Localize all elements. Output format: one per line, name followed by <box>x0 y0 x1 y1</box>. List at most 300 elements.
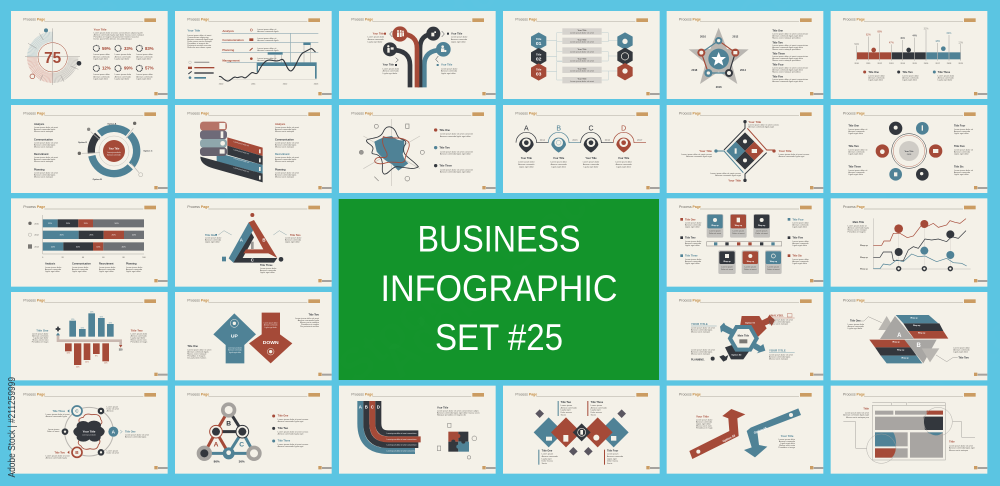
top triangles <box>878 316 914 339</box>
triangle labels: Ligula eget dolor <box>285 241 300 244</box>
slide footer <box>810 92 823 95</box>
slide footer <box>810 373 823 376</box>
text list: Aenean commodo ligula <box>275 128 297 131</box>
inner circle <box>99 136 129 166</box>
pin connector line <box>516 132 646 143</box>
tree nodes <box>383 26 451 57</box>
pin letters <box>524 126 626 133</box>
title one: Penatibus et magn <box>32 341 48 344</box>
title two <box>558 401 578 416</box>
bubbles <box>894 220 954 259</box>
process labels: Management <box>222 59 240 63</box>
band letters <box>359 404 380 409</box>
slide header <box>187 392 320 397</box>
stat captions: Ligula eget dolor <box>115 58 130 61</box>
puzzle icons <box>437 423 477 459</box>
hexagon option labels <box>731 321 756 357</box>
title one: Penatibus et magnis <box>187 354 205 357</box>
column notes: Aenean commodo <box>126 268 143 271</box>
band letters: C <box>371 404 374 409</box>
tree captions <box>368 36 468 75</box>
years: 2010 <box>700 35 706 39</box>
column notes: Communication <box>72 263 91 266</box>
right labels: Lorem ipsum dolor <box>792 222 809 225</box>
panel: slide 8 ribbons <box>175 105 332 193</box>
row labels: Wrap up <box>860 244 869 247</box>
main title: Penatibus et magnis <box>848 231 866 234</box>
lollipop labels: 30% <box>900 38 905 40</box>
teal bars <box>69 313 114 337</box>
side notes: Lorem ipsum <box>107 450 118 453</box>
years: 2016 <box>605 140 611 142</box>
left text list: Lorem ipsum dolor sit amet <box>34 156 58 159</box>
legend: Aenean commodo ligula eget <box>278 445 304 448</box>
bar values <box>66 312 113 368</box>
bar text: Your Title <box>578 67 587 70</box>
left text list: Communication <box>34 138 53 141</box>
slide header: Process Page <box>23 299 45 303</box>
side notes: Dolor sit amet <box>107 408 119 411</box>
bar value labels: 15% <box>84 223 88 225</box>
triangle labels: Lorem ipsum dolor <box>205 237 222 240</box>
labels: Aenean commodo <box>848 325 865 328</box>
percentages: 57% <box>145 66 154 71</box>
side notes: Lorem ipsum <box>107 406 118 409</box>
top cards: Lorem ipsum <box>733 230 744 233</box>
dial chart <box>25 28 80 85</box>
text list: Massa sociis natoque <box>275 130 295 133</box>
diamond nodes <box>714 120 776 182</box>
left labels: Aenean commodo <box>685 242 702 245</box>
your title teal: Ligula eget dolor <box>780 442 795 445</box>
lollipop labels: 62% <box>866 35 871 37</box>
hexagon option labels: Option 01 <box>745 321 756 324</box>
red bars <box>65 343 109 365</box>
slide header: Process Page <box>843 112 865 116</box>
panel: slide 16 up down arrows <box>175 292 332 380</box>
left text list: Analysis <box>34 123 45 126</box>
top cards: Dolor sit amet <box>709 232 722 235</box>
right text list: Title Six <box>954 166 964 169</box>
labels: Ligula eget dolor <box>848 327 863 330</box>
title one: Ligula eget dolor <box>34 337 49 340</box>
left callout: Massa sociis natoque pen <box>846 416 869 419</box>
pins <box>519 138 631 153</box>
stat captions: Aenean commodo <box>93 55 110 58</box>
slide footer <box>974 92 987 95</box>
slide header <box>187 205 320 209</box>
title two <box>131 328 148 344</box>
triangle labels: Title One <box>205 234 216 237</box>
text list: Lorem ipsum dolor sit amet <box>275 141 299 144</box>
legend: Lorem ipsum dolor <box>938 74 954 77</box>
bar text: Your Title <box>578 78 587 81</box>
slide header: Process Page <box>351 392 373 396</box>
triangle labels: Aenean commodo <box>260 269 277 272</box>
text list: Title One <box>772 30 784 33</box>
your title left: Lorem ipsum dolor sit amet <box>691 327 715 330</box>
text list: Aenean commodo ligula <box>275 143 297 146</box>
left text list: Title One <box>848 125 860 128</box>
diamond labels: Your Title <box>748 120 762 124</box>
your title red: Aenean commodo <box>696 421 713 424</box>
slide header <box>843 112 976 116</box>
band letters: B <box>365 404 368 409</box>
title two: Dolor massa <box>561 411 573 414</box>
title three: Ligula eget <box>591 409 601 412</box>
left text list: Aenean commodo <box>848 171 865 174</box>
triangle letters: A <box>240 238 244 243</box>
right text list <box>954 125 973 176</box>
axis labels: 2018 <box>947 63 952 65</box>
side notes <box>47 406 119 455</box>
bottom cards: Lorem ipsum <box>768 266 779 269</box>
watermark: Adobe Stock <box>692 150 936 377</box>
radar red outline <box>375 137 409 164</box>
slide header: Process Page <box>351 18 373 22</box>
axis labels <box>854 63 964 65</box>
stat captions: Aenean commodo <box>93 75 110 78</box>
legend: Lorem ipsum dolor sit amet consec <box>278 443 308 446</box>
left labels: Aenean commodo <box>685 260 702 263</box>
your title red: Massa sociis nato <box>696 425 713 428</box>
legend: Aenean commodo ligula eget <box>278 432 304 435</box>
axis labels: 2010 <box>854 63 860 65</box>
triangle labels <box>205 234 302 274</box>
slide footer <box>810 279 823 282</box>
triangle labels: Lorem ipsum dolor <box>260 267 277 270</box>
slide header <box>23 205 156 209</box>
your title teal: Penatibus et magn <box>778 446 795 449</box>
lollipop labels: 18% <box>935 41 940 43</box>
slide footer <box>482 186 496 189</box>
legend: Title Three <box>278 440 291 443</box>
text list: Lorem ipsum dolor sit amet <box>275 172 299 175</box>
diamond labels: Aenean commodo ligula eget <box>715 174 741 177</box>
title two: Dis parturient montes <box>300 325 319 328</box>
pin captions: Your Title <box>553 157 565 160</box>
stat captions: Aenean commodo <box>136 75 153 78</box>
text list: Aenean commodo ligula eget dolor <box>772 34 803 37</box>
slide header <box>351 392 484 397</box>
slide header <box>843 299 976 303</box>
radar legend: Lorem ipsum dolor sit amet consectet <box>440 168 473 171</box>
analysis: Massa sociis natoque <box>769 323 789 326</box>
letter nodes <box>72 406 118 457</box>
text list: Massa sociis natoque penatibus <box>772 48 801 51</box>
left text list: Massa sociis natoque <box>34 145 54 148</box>
legend: Lorem ipsum dolor sit amet consec <box>278 430 308 433</box>
legend: Lorem ipsum dolor <box>902 74 919 77</box>
labels: Lorem ipsum dolor <box>848 323 864 326</box>
row labels: Wrap up <box>860 267 869 270</box>
slide footer <box>974 279 987 282</box>
panel: slide 24 diamonds <box>503 386 660 474</box>
radar legend: Aenean commodo ligula eget dolor <box>440 171 471 174</box>
legend <box>272 414 308 448</box>
labels: Lorem ipsum dolor <box>953 346 970 349</box>
panel: slide 11 diamond <box>667 105 823 193</box>
process labels: Communication <box>222 38 244 42</box>
letters <box>214 421 244 449</box>
right text list: Ligula eget dolor <box>954 152 969 155</box>
triangle labels: Title Two <box>290 234 301 237</box>
axis: 2012 <box>283 83 287 85</box>
diamond labels: Aenean commodo ligula eget <box>748 126 774 129</box>
letter nodes: A <box>112 429 116 434</box>
centre ring: Your Title <box>905 150 914 153</box>
text intro: Donec quam felis ultricies nec pellentesque <box>94 38 133 41</box>
ribbon tab icons <box>219 123 225 154</box>
legend <box>863 70 955 81</box>
text list: Aenean commodo ligula eget dolor <box>772 46 803 49</box>
title four: Ligula eget <box>607 457 617 460</box>
stat captions: Ligula eget dolor <box>136 78 151 81</box>
text list: Massa sociis natoque penatibus <box>772 36 801 39</box>
labels: Title One <box>125 430 136 433</box>
right labels: Ligula eget dolor <box>792 244 807 247</box>
title three: Aenean commodo <box>591 406 608 409</box>
text list: Lorem ipsum dolor sit amet consectetuer <box>772 55 809 58</box>
intro text: Penatibus et magnis dis <box>187 42 208 45</box>
text list: Lorem ipsum dolor sit amet consectetuer <box>772 32 809 35</box>
panel: slide 4 hexagons <box>503 11 660 99</box>
labels <box>46 409 149 460</box>
planning: Aenean commodo ligula <box>691 351 713 354</box>
ring segments <box>91 128 137 174</box>
lollipop labels: 12% <box>958 42 963 44</box>
slide header: Process Page <box>351 112 373 116</box>
bar value labels: 15% <box>48 223 52 225</box>
panel: slide 19 hexagon <box>667 292 823 380</box>
slide header <box>23 18 156 22</box>
column notes: Lorem ipsum dolor <box>99 266 116 269</box>
title one <box>187 345 212 359</box>
labels: Aenean commodo ligula <box>125 435 147 438</box>
legend: Title Two <box>278 427 289 430</box>
percent labels: 86% <box>214 460 220 464</box>
text list: Title Four <box>772 64 784 67</box>
triangle letters: C <box>251 258 254 263</box>
big diamonds <box>534 417 629 447</box>
text list: Title Two <box>772 41 783 44</box>
letters: A <box>214 442 219 449</box>
slide header: Process Page <box>187 392 209 396</box>
text list: Lorem ipsum dolor sit amet <box>275 156 299 159</box>
six nodes <box>876 122 942 181</box>
intro text: Your Title <box>187 29 201 33</box>
legend: Ligula eget dolor <box>938 78 953 81</box>
slide header: Process Page <box>679 205 701 209</box>
triangle bands <box>229 220 277 263</box>
left text list: Aenean commodo ligula <box>34 143 56 146</box>
title two: Massa sociis natoque <box>300 321 320 324</box>
intro text <box>187 29 213 49</box>
bar values: 12% <box>71 319 75 321</box>
left hexagons: Title <box>536 37 542 41</box>
process labels: Analysis <box>222 29 234 33</box>
right callout: Lorem ipsum dolor sit amet <box>949 444 973 447</box>
labels: Lorem ipsum dolor sit amet <box>46 413 70 416</box>
watermark: Adobe Stock <box>62 110 306 337</box>
left callout <box>843 407 869 419</box>
band letters: D <box>377 404 380 409</box>
year labels and icons <box>28 222 40 249</box>
right callout <box>949 440 975 452</box>
tree captions: Aenean commodo <box>451 38 468 41</box>
centre hexagon: Main Title <box>738 335 750 338</box>
panel: slide 12 six nodes <box>831 105 987 193</box>
bottom cards: Wrap up <box>723 261 732 263</box>
option labels <box>78 122 153 181</box>
left text list: Ligula eget dolor <box>848 132 863 135</box>
column notes: Ligula eget dolor <box>126 270 141 273</box>
text list: Recruitment <box>275 153 290 156</box>
radar icons <box>359 124 424 181</box>
axes <box>873 218 971 269</box>
puzzle <box>448 432 469 452</box>
slide header: Process Page <box>23 205 45 209</box>
pin captions: Aenean commodo <box>616 163 633 166</box>
tree captions: Lorem ipsum dolor <box>451 36 468 39</box>
your title left: YOUR TITLE <box>691 322 708 326</box>
down arrow: Aenean commodo <box>264 324 277 327</box>
diamond labels: Lorem ipsum dolor sit amet consec <box>710 172 741 175</box>
labels: Title Two <box>54 451 65 454</box>
bar value labels: 20% <box>51 246 55 248</box>
lollipop labels: 52% <box>854 44 859 46</box>
main title: Massa sociis natoque <box>848 229 868 232</box>
connectors <box>218 231 287 235</box>
left hexagons: Title <box>536 68 542 72</box>
planning: PLANNING. <box>691 358 705 361</box>
text list: Title Five <box>772 75 784 78</box>
letter nodes: C <box>75 409 79 414</box>
column notes: Ligula eget dolor <box>72 270 87 273</box>
red arrow <box>689 409 745 459</box>
slide footer <box>646 466 660 469</box>
percentages: 83% <box>145 46 154 51</box>
pin captions: Lorem ipsum dolor <box>518 161 535 164</box>
axis: 60 <box>102 257 105 259</box>
left hexagons <box>531 32 546 81</box>
ring icons <box>78 122 143 177</box>
legend: Lorem ipsum dolor <box>868 74 885 77</box>
your title left: Aenean commodo ligula <box>691 329 713 332</box>
bottom cards: Dolor sit amet <box>767 268 780 271</box>
intro text: Dolor massa sociis natoque <box>187 40 213 43</box>
centre hexagon <box>728 325 759 352</box>
dial value: 75 <box>44 50 62 67</box>
triangle labels: Lorem ipsum dolor <box>285 237 302 240</box>
pin captions: Lorem ipsum dolor <box>550 161 567 164</box>
bar values: 16% <box>99 316 104 318</box>
slide header <box>23 392 156 397</box>
title two: Sociis <box>561 414 566 416</box>
timeline bars <box>257 43 317 79</box>
your title left: Massa sociis natoque <box>691 331 711 334</box>
left text list: Aenean commodo ligula <box>34 128 56 131</box>
bottom bands <box>869 340 922 363</box>
bottom cards: Lorem ipsum <box>721 266 733 269</box>
slide header: Process Page <box>23 112 45 116</box>
axis labels: 2016 <box>924 63 929 65</box>
year labels and icons: 2014 <box>34 246 40 248</box>
title one: Lorem ipsum dolor sit amet <box>187 348 212 351</box>
outer nodes <box>197 402 262 461</box>
left labels: Ligula eget dolor <box>685 262 700 265</box>
text list: Planning <box>275 169 286 172</box>
title one <box>538 450 559 465</box>
left text list: Lorem ipsum dolor sit amet <box>34 172 58 175</box>
side notes: Aenean <box>107 410 114 413</box>
panel: slide 21 cloud <box>11 386 168 474</box>
small nodes <box>62 408 104 456</box>
timeline band <box>707 242 782 246</box>
bottom bands: Wrap up <box>897 349 905 351</box>
column notes: Aenean commodo <box>72 268 89 271</box>
text list: Communication <box>275 138 294 141</box>
row icons and captions: Lorem ipsum dolor sit <box>257 37 277 40</box>
radar axes <box>363 119 420 186</box>
slide header <box>515 18 648 22</box>
column notes: Recruitment <box>99 263 114 266</box>
slide footer <box>154 92 168 95</box>
inner diamonds <box>726 132 764 170</box>
outer ring <box>65 407 113 456</box>
slide header: Process Page <box>679 18 701 22</box>
top cards: Wrap up <box>758 225 766 227</box>
panel: slide 22 triangle network <box>175 386 332 474</box>
ribbon band captions: Lorem ipsum dolor sit <box>233 140 250 147</box>
left text list: Aenean commodo ligula <box>34 174 56 177</box>
your title left <box>691 322 717 334</box>
band captions: Lorem ipsum dolor sit amet consectetuer <box>387 438 417 441</box>
down arrow: Ligula eget dolor <box>265 326 277 329</box>
planning: Lorem ipsum dolor sit amet <box>691 349 715 352</box>
stat captions: Ligula eget dolor <box>93 78 108 81</box>
top cards: Lorem ipsum <box>756 230 768 233</box>
letter nodes: B <box>75 450 79 455</box>
row icons and captions: Aenean commodo ligula <box>257 59 280 62</box>
left text list: Title Three <box>848 166 861 169</box>
option labels: Option A <box>107 122 117 125</box>
bar text: Your Title <box>578 38 587 41</box>
right text list: Title Four <box>954 125 965 128</box>
slide footer <box>974 373 987 376</box>
slide header: Process Page <box>515 112 537 116</box>
stat captions: Aenean commodo <box>115 55 132 58</box>
left hexagons: Title <box>536 52 542 56</box>
title two: Penatibus et magn <box>131 341 147 344</box>
tree labels: Your Title <box>451 32 463 35</box>
left text list: Lorem ipsum dolor sit amet <box>34 126 58 129</box>
year labels and icons: 2015 <box>34 223 40 225</box>
top bands: Wrap up <box>910 317 919 319</box>
up arrow <box>213 313 256 363</box>
title one <box>32 328 49 344</box>
title two: Aenean commodo <box>131 335 148 338</box>
labels: Aenean commodo ligula <box>46 457 68 460</box>
stat captions: Lorem ipsum dolor <box>93 53 110 56</box>
legend: Title Two <box>902 71 913 74</box>
lollipop labels: 31% <box>924 28 928 30</box>
triangle letters: B <box>262 238 266 243</box>
pin letters: A <box>524 126 529 133</box>
column notes: Aenean commodo <box>99 268 116 271</box>
axis labels: 2012 <box>877 63 882 65</box>
centre icon <box>251 242 254 249</box>
